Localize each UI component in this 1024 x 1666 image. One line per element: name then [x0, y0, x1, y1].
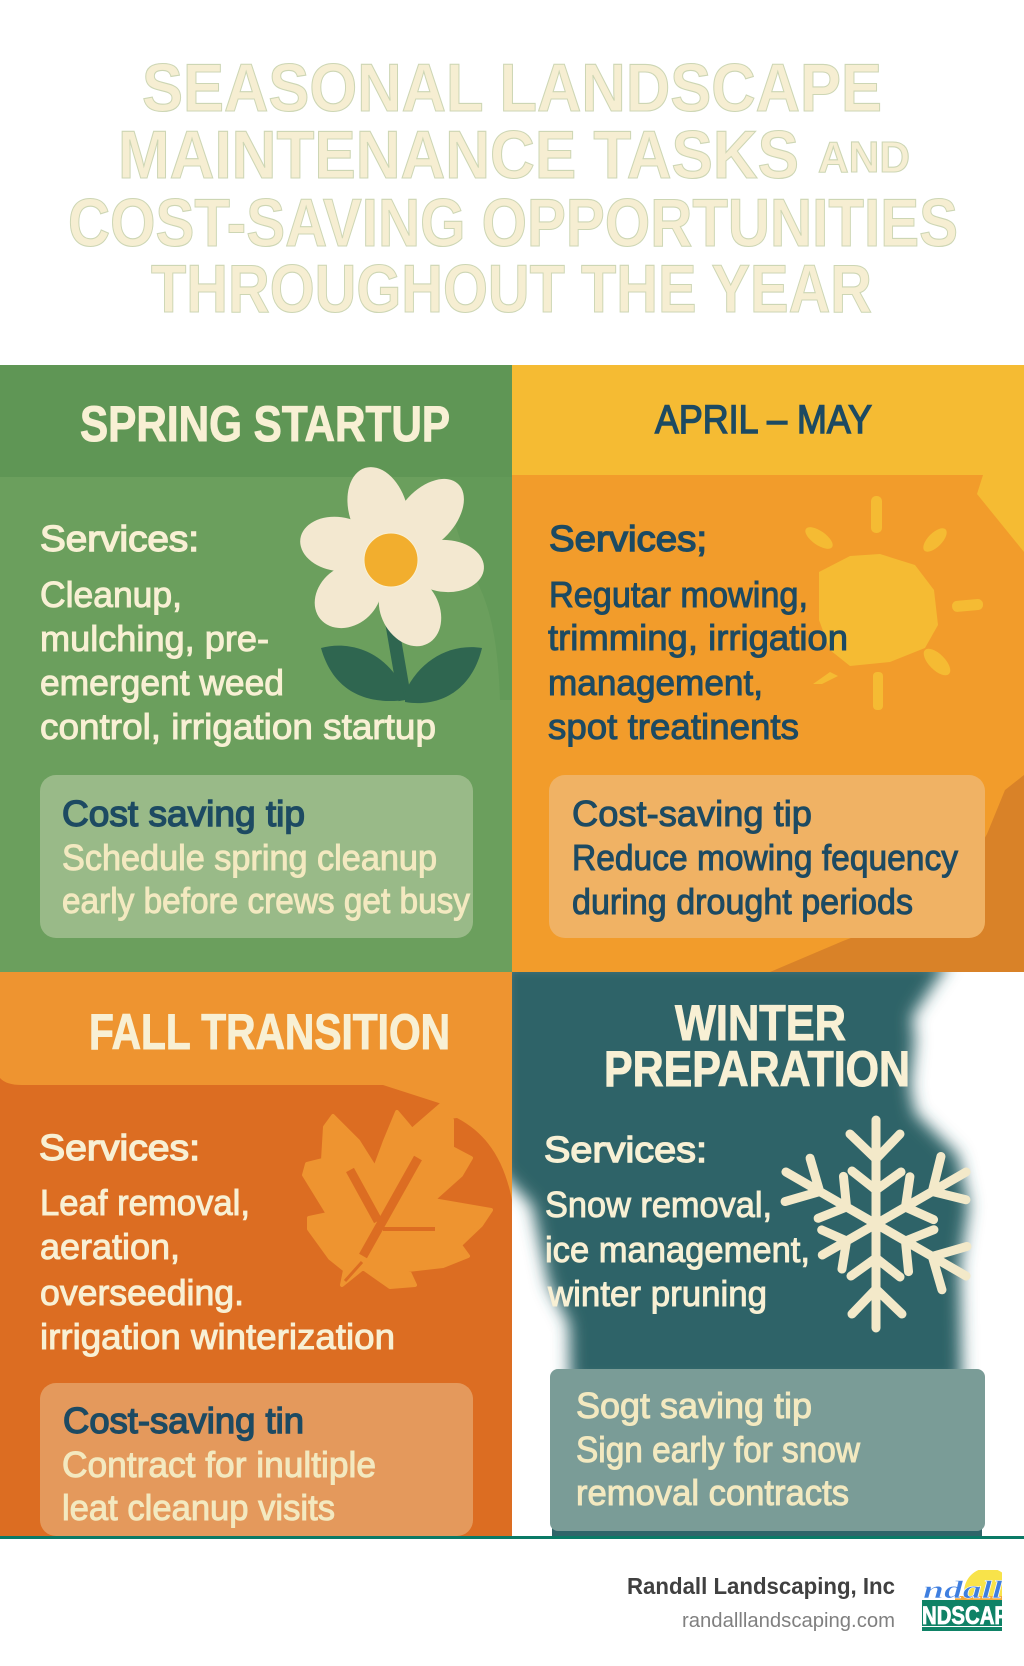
spring services: Services:: [40, 518, 199, 559]
april tip box: during drought periods: [572, 881, 913, 922]
title: AND: [818, 133, 910, 182]
title: THROUGHOUT THE YEAR: [151, 251, 872, 327]
fall tip box: leat cleanup visits: [62, 1487, 335, 1528]
april services: management,: [548, 662, 763, 703]
panel: fall transition: [0, 972, 512, 1536]
april services: [548, 518, 848, 747]
fall services: Services:: [39, 1127, 200, 1168]
spring shaded edge: [440, 477, 512, 700]
winter heading: WINTER: [675, 995, 846, 1051]
fall body: [0, 1078, 512, 1536]
winter heading: PREPARATION: [604, 1041, 910, 1097]
title: SEASONAL LANDSCAPE: [142, 50, 882, 126]
april header band: [512, 365, 1024, 552]
panel: spring startup: [0, 365, 512, 972]
footer company name: Randall Landscaping, Inc: [627, 1573, 895, 1599]
fall services: [39, 1127, 395, 1357]
winter services: ice management,: [545, 1229, 810, 1270]
winter tip box: Sign early for snow: [576, 1429, 861, 1470]
april tip box: Cost-saving tip: [572, 793, 812, 834]
footer rule: [0, 1536, 1024, 1539]
spring services: mulching, pre-: [40, 618, 269, 659]
winter tip box: [550, 1369, 985, 1536]
fall services: overseeding.: [40, 1272, 244, 1313]
april services: trimming, irrigation: [548, 617, 848, 658]
logo: ndalli: [923, 1577, 1013, 1604]
april tip box: Reduce mowing fequency: [572, 837, 958, 878]
icon: sun: [802, 496, 983, 710]
winter tip box: removal contracts: [576, 1472, 849, 1513]
spring heading: SPRING STARTUP: [80, 396, 450, 452]
icon: leaf: [304, 1104, 491, 1287]
icon: snowflake: [773, 1120, 979, 1328]
logo: [922, 1570, 1002, 1631]
april heading: APRIL – MAY: [655, 398, 872, 442]
spring header band: [0, 365, 512, 477]
winter services: [544, 1129, 810, 1314]
april services: spot treatinents: [548, 706, 799, 747]
fall heading: FALL TRANSITION: [89, 1004, 450, 1060]
spring services: emergent weed: [40, 662, 284, 703]
spring services: control, irrigation startup: [40, 706, 436, 747]
winter tip box: Sogt saving tip: [576, 1385, 812, 1426]
april services: Services;: [549, 518, 707, 559]
winter background shape: [500, 960, 969, 1385]
spring tip box: Schedule spring cleanup: [62, 837, 437, 878]
title: MAINTENANCE TASKS: [118, 117, 799, 193]
footer website: randalllandscaping.com: [682, 1610, 895, 1632]
spring services: Cleanup,: [40, 574, 182, 615]
spring tip box: Cost saving tip: [62, 793, 305, 834]
winter services: winter pruning: [547, 1273, 767, 1314]
fall services: aeration,: [40, 1226, 180, 1267]
april services: Regutar mowing,: [549, 574, 808, 615]
fall services: irrigation winterization: [40, 1316, 395, 1357]
fall tip box: [40, 1383, 473, 1536]
fall tip box: Cost-saving tin: [63, 1400, 304, 1441]
winter services: Services:: [544, 1129, 707, 1170]
spring tip box: early before crews get busy: [62, 880, 470, 921]
winter services: Snow removal,: [545, 1184, 772, 1225]
darker corner: [770, 775, 1024, 972]
spring services: [40, 518, 436, 747]
title: [68, 50, 958, 327]
panel: winter preparation: [500, 960, 985, 1536]
april tip box: [549, 775, 985, 938]
winter heading: [604, 995, 910, 1097]
icon: flower: [297, 459, 486, 703]
fall tip box: Contract for inultiple: [62, 1444, 376, 1485]
fall services: Leaf removal,: [40, 1182, 250, 1223]
spring tip box: [40, 775, 473, 938]
panel: april may: [512, 365, 1024, 972]
